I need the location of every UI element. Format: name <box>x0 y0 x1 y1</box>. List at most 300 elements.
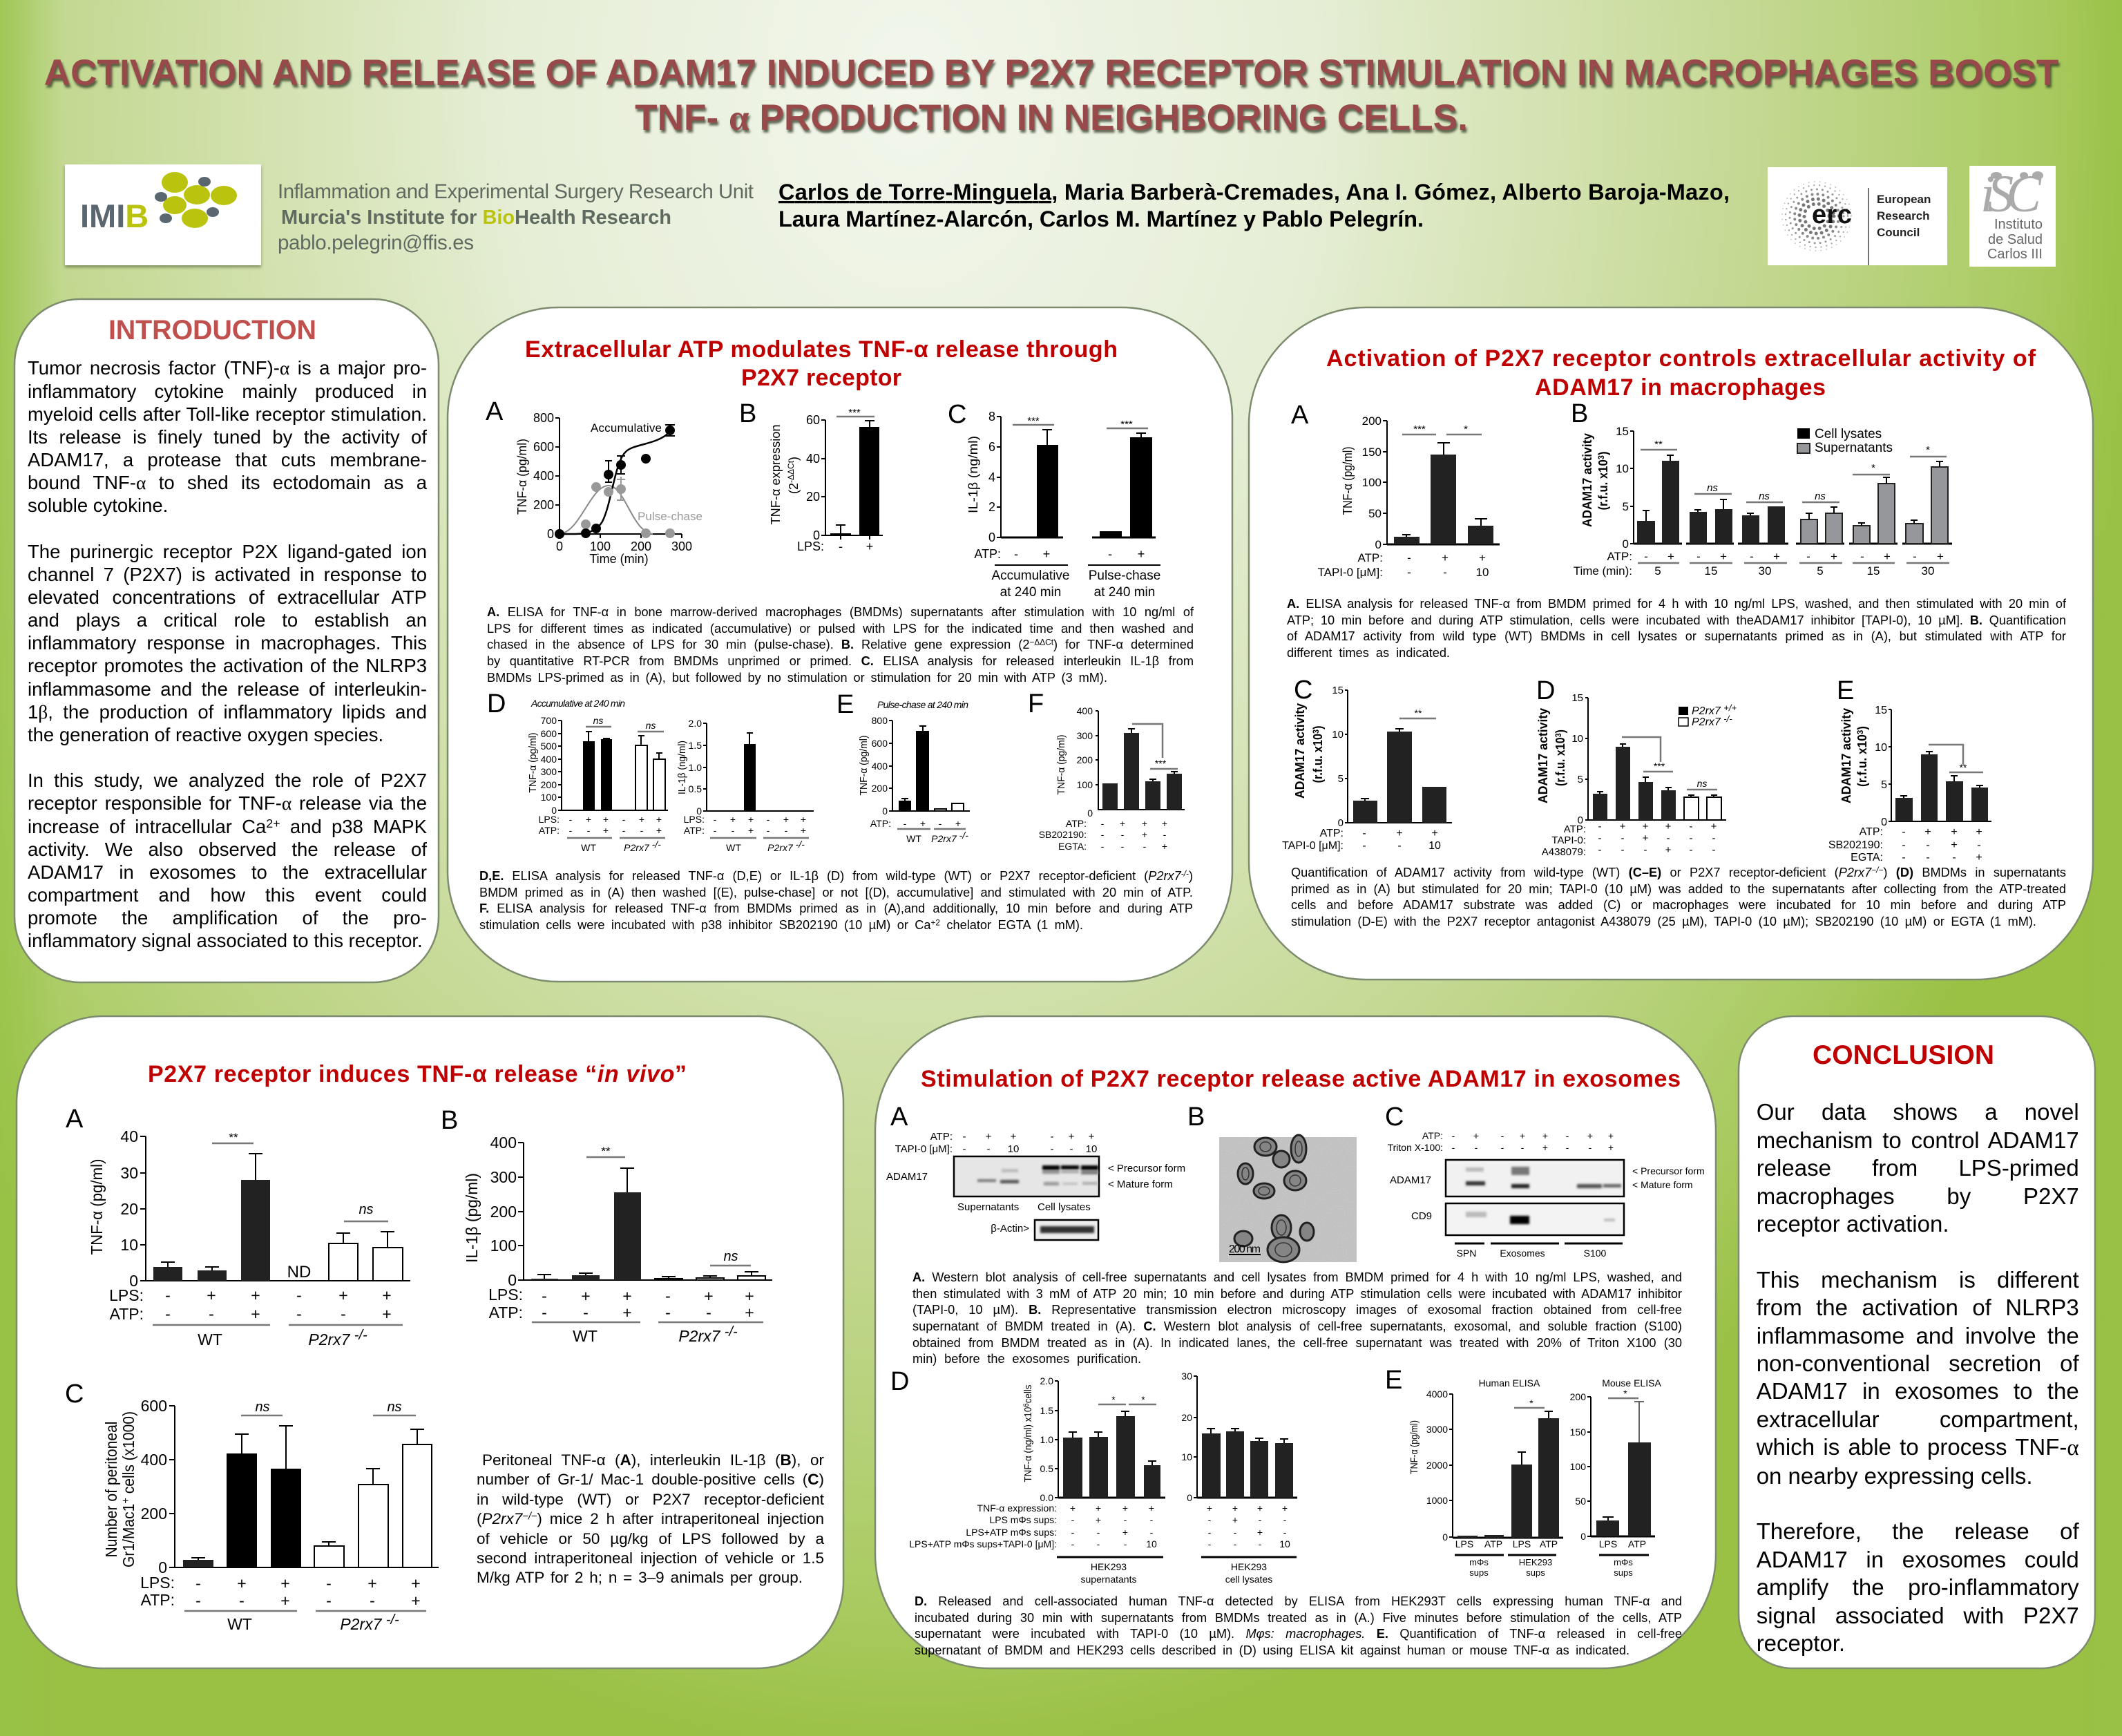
chart E: ADAM17 activity inhibitors: SB202190: <box>1828 839 1883 851</box>
western blot A: TAPI-0 [μM]: <box>895 1143 953 1155</box>
text block: conclusion: receptor. <box>1757 1630 1845 1656</box>
chart C: peritoneal cell counts: 200 <box>141 1505 167 1523</box>
chart E: human and mouse ELISA: LPS <box>1599 1538 1617 1549</box>
western blot A: ATP: <box>930 1131 953 1143</box>
chart C: ADAM17 activity with TAPI-0: 10 <box>1428 840 1441 852</box>
logo: European Research Council: Research <box>1877 209 1930 222</box>
chart D: human TNF in HEK293: --- <box>1208 1538 1262 1549</box>
text block: introduction: 1β, the production of inflammatory lipids and <box>28 701 427 723</box>
chart B: ADAM17 activity time course: * <box>1871 462 1875 474</box>
chart A: TNF time course: 0 <box>556 540 563 553</box>
chart C: peritoneal cell counts: ATP: <box>141 1591 175 1609</box>
chart E: ADAM17 activity inhibitors: 15 <box>1875 705 1887 716</box>
chart B: TNF expression: LPS: <box>797 540 824 553</box>
chart B: ADAM17 activity time course: 5 <box>1817 564 1824 578</box>
chart A: TNF time course: A <box>486 397 504 426</box>
text block: conclusion: receptor activation. <box>1757 1211 1949 1237</box>
affiliation text: Inflammation and Experimental Surgery Research Unit <box>278 180 754 203</box>
caption: charts A and B: A. ELISA analysis for released TNF-α from BMDM primed for 4 h with 10 ng/ml LPS, washed, and then stimulated with 20 min of <box>1287 597 2066 611</box>
text block: introduction <box>28 356 427 964</box>
chart E: human and mouse ELISA: 150 <box>1570 1427 1586 1438</box>
chart C: ADAM17 activity with TAPI-0: 5 <box>1338 773 1344 785</box>
chart C: ADAM17 activity with TAPI-0: 15 <box>1332 685 1344 696</box>
chart B: ADAM17 activity time course: 30 <box>1922 564 1934 578</box>
chart C: IL-1 beta release: 6 <box>988 440 995 454</box>
caption: in vivo charts: M/kg ATP for 2 h; n = 3–9 animals per group. <box>477 1569 803 1586</box>
chart B: TNF expression: 60 <box>806 413 820 427</box>
text block: introduction: ADAM17, a protease that cuts membrane- <box>28 449 427 470</box>
chart D: accumulative TNF and IL-1 beta: -++-++ <box>714 814 806 825</box>
text block: conclusion: on nearby expressing cells. <box>1757 1463 2033 1489</box>
heading: panel 2: Extracellular ATP modulates TNF-α release through <box>525 336 1118 363</box>
chart D: accumulative TNF and IL-1 beta: P2rx7 <box>624 842 649 853</box>
chart A: TNF with TAPI-0: 10 <box>1476 566 1489 579</box>
chart B: peritoneal IL-1 beta: ** <box>601 1145 611 1158</box>
western blot A: Supernatants <box>957 1201 1019 1213</box>
chart B: peritoneal IL-1 beta: LPS: <box>488 1286 523 1304</box>
chart C: IL-1 beta release: 2 <box>988 500 995 514</box>
chart E: pulse-chase TNF: 600 <box>872 738 888 749</box>
text block: introduction: The purinergic receptor P2X ligand-gated ion <box>28 541 427 562</box>
chart B: ADAM17 activity time course: -+-+-+-+-+-+ <box>1644 550 1944 563</box>
chart E: ADAM17 activity inhibitors: 0 <box>1881 817 1887 828</box>
logo: European Research Council <box>1768 167 1947 265</box>
chart D: human TNF in HEK293: 10 <box>1279 1538 1290 1549</box>
chart A: TNF time course: TNF-α (pg/ml) <box>515 439 529 515</box>
chart E: human and mouse ELISA: 0 <box>1580 1531 1586 1542</box>
chart C: peritoneal cell counts: + <box>120 1498 132 1504</box>
chart B: ADAM17 activity time course: Time (min): <box>1574 564 1632 578</box>
chart D: human TNF in HEK293: 0 <box>1187 1492 1192 1503</box>
chart D: human TNF in HEK293: cells <box>1022 1384 1034 1403</box>
chart A: TNF with TAPI-0: 50 <box>1368 507 1382 520</box>
text block: conclusion: Our data shows a novel <box>1757 1099 2079 1125</box>
chart E: ADAM17 activity inhibitors: ADAM17 activity <box>1839 708 1853 803</box>
chart E: human and mouse ELISA: 4000 <box>1426 1389 1448 1400</box>
chart D: accumulative TNF and IL-1 beta: 1.5 <box>689 740 702 751</box>
chart E: ADAM17 activity inhibitors: ---+ <box>1902 852 1982 864</box>
chart E: ADAM17 activity inhibitors: --+- <box>1902 839 1981 851</box>
chart A: peritoneal TNF: 0 <box>129 1272 138 1290</box>
text block: introduction: soluble cytokine. <box>28 495 168 516</box>
chart F: inhibitors TNF: EGTA: <box>1058 841 1087 852</box>
caption: charts A to C: LPS for different times as indicated (accumulative) or pulsed with LPS for the indicated time and then washed and <box>487 622 1194 636</box>
chart D: ADAM17 activity knock-out: 10 <box>1571 733 1583 745</box>
text block: introduction: Tumor necrosis factor (TNF)-α is a major pro- <box>28 357 427 379</box>
chart C: IL-1 beta release: Accumulative <box>992 569 1069 583</box>
chart F: inhibitors TNF: -+++ <box>1101 818 1167 829</box>
caption: in vivo charts: in wild-type (WT) or P2X7 receptor-deficient <box>477 1491 824 1508</box>
western blot A: A <box>890 1103 908 1132</box>
legend: -/- <box>1723 714 1732 724</box>
chart D: human TNF in HEK293: 2.0 <box>1040 1375 1053 1386</box>
western blot A: Cell lysates <box>1038 1201 1091 1213</box>
western blot A: < Precursor form <box>1108 1163 1185 1174</box>
chart E: human and mouse ELISA <box>1385 1366 1661 1578</box>
chart C: peritoneal cell counts: Number of peritoneal <box>102 1422 120 1557</box>
chart D: accumulative TNF and IL-1 beta <box>487 689 814 853</box>
heading: panel 3: Activation of P2X7 receptor controls extracellular activity of <box>1326 345 2036 372</box>
chart D: ADAM17 activity knock-out: 0 <box>1578 814 1583 826</box>
chart D: ADAM17 activity knock-out: ) <box>1554 729 1567 733</box>
logo: IMIB: IMIB <box>80 198 149 234</box>
chart B: peritoneal IL-1 beta <box>441 1106 772 1345</box>
chart D: human TNF in HEK293: ++++ <box>1207 1503 1288 1514</box>
chart E: pulse-chase TNF: 800 <box>872 715 888 726</box>
panel: introduction <box>15 299 439 982</box>
chart E: human and mouse ELISA: ATP <box>1484 1538 1502 1549</box>
logo: European Research Council: erc <box>1812 200 1852 229</box>
heading: introduction: INTRODUCTION <box>108 315 316 345</box>
chart E: human and mouse ELISA: sups <box>1469 1567 1489 1578</box>
caption: in vivo charts: number of Gr-1/ Mac-1 double-positive cells (C) <box>477 1471 824 1488</box>
caption: charts C to E: stimulation (D-E) with the P2X7 receptor antagonist A438079 (25 µM), TAPI-0 (10 µM); SB202190 (10 µM) or EGTA (1 mM). <box>1291 915 2036 928</box>
western blot A: 10 <box>1008 1143 1019 1155</box>
caption: in vivo charts <box>477 1451 824 1592</box>
chart B: TNF expression: 20 <box>806 490 820 504</box>
chart C: IL-1 beta release: Pulse-chase <box>1089 569 1160 583</box>
panel: exosomes <box>875 1016 1716 1668</box>
chart A: peritoneal TNF: TNF-α (pg/ml) <box>88 1159 106 1255</box>
chart C: ADAM17 activity with TAPI-0: 3 <box>1311 729 1321 734</box>
chart D: human TNF in HEK293: HEK293 <box>1231 1561 1267 1572</box>
chart A: peritoneal TNF: ND <box>287 1263 311 1281</box>
chart C: peritoneal cell counts: cells (x1000) <box>120 1411 137 1498</box>
chart A: TNF with TAPI-0: * <box>1464 423 1468 435</box>
chart C: peritoneal cell counts: ns <box>255 1400 270 1415</box>
chart B: ADAM17 activity time course: (r.f.u. x10 <box>1596 455 1610 510</box>
chart C: peritoneal cell counts: 400 <box>141 1451 167 1469</box>
chart A: peritoneal TNF: --+--+ <box>165 1305 392 1323</box>
chart D: accumulative TNF and IL-1 beta: ns <box>646 720 656 731</box>
chart B: peritoneal IL-1 beta: 0 <box>508 1271 517 1289</box>
chart E: pulse-chase TNF: E <box>837 690 854 719</box>
chart D: accumulative TNF and IL-1 beta: TNF-α (pg/ml) <box>527 732 539 793</box>
chart C: IL-1 beta release: at 240 min <box>1000 585 1061 600</box>
chart B: ADAM17 activity time course: 30 <box>1759 564 1771 578</box>
chart E: human and mouse ELISA: mΦs <box>1614 1557 1633 1567</box>
logo: Instituto de Salud Carlos III: Instituto <box>1994 217 2043 232</box>
chart F: inhibitors TNF: ATP: <box>1066 818 1087 829</box>
chart F: inhibitors TNF: --+- <box>1101 829 1167 840</box>
chart E: human and mouse ELISA: 0 <box>1442 1532 1448 1543</box>
chart A: TNF with TAPI-0: *** <box>1413 423 1426 435</box>
chart B: ADAM17 activity time course: 5 <box>1654 564 1661 578</box>
chart D: human TNF in HEK293: -+-- <box>1071 1514 1154 1525</box>
logo: IMIB <box>65 164 261 265</box>
chart D: human TNF in HEK293: LPS mΦs sups: <box>989 1514 1057 1525</box>
text block: introduction: ADAM17 in exosomes to the extracellular <box>28 861 427 883</box>
chart A: peritoneal TNF: P2rx7 <box>308 1330 350 1348</box>
caption: charts D to F: BMDM primed as in (A) then washed [(E), pulse-chase] or not [(D), accumulative] and stimulated with 20 min of ATP. <box>479 886 1193 899</box>
chart A: TNF time course: 600 <box>533 440 554 454</box>
chart C: IL-1 beta release: ATP: <box>974 547 1001 561</box>
logo: Instituto de Salud Carlos III <box>1969 165 2056 267</box>
heading: panel 5: Stimulation of P2X7 receptor release active ADAM17 in exosomes <box>921 1066 1681 1092</box>
chart D: accumulative TNF and IL-1 beta: 0 <box>696 805 702 817</box>
logo: European Research Council: Council <box>1877 226 1920 239</box>
caption: in vivo charts: second intraperitoneal injection of vehicle or 1.5 <box>477 1549 824 1567</box>
western blot C: ATP: <box>1422 1130 1443 1141</box>
chart D: accumulative TNF and IL-1 beta: P2rx7 <box>767 842 793 853</box>
chart D: human TNF in HEK293: HEK293 <box>1091 1561 1127 1572</box>
chart E: pulse-chase TNF: ATP: <box>870 818 891 829</box>
chart B: peritoneal IL-1 beta: -/- <box>725 1324 738 1339</box>
chart D: human TNF in HEK293: 0.0 <box>1040 1492 1053 1503</box>
electron microscopy image B: 200 nm <box>1229 1243 1261 1255</box>
chart B: peritoneal IL-1 beta: --+--+ <box>542 1304 754 1322</box>
affiliation text <box>278 180 754 254</box>
caption: in vivo charts: of vehicle or 50 µg/kg of LPS followed by a <box>477 1530 824 1547</box>
western blot C: < Precursor form <box>1632 1165 1705 1176</box>
chart B: ADAM17 activity time course: 15 <box>1616 425 1629 438</box>
chart B: ADAM17 activity time course: ) <box>1596 452 1610 455</box>
chart E: ADAM17 activity inhibitors: 10 <box>1875 742 1887 754</box>
chart E: human and mouse ELISA: 1000 <box>1426 1495 1448 1506</box>
chart C: peritoneal cell counts: WT <box>227 1615 252 1633</box>
chart A: TNF time course <box>486 397 702 566</box>
chart B: TNF expression: -ΔΔCt <box>786 460 796 483</box>
chart D: human TNF in HEK293: 1.5 <box>1040 1405 1053 1416</box>
panel: in vivo <box>17 1016 843 1668</box>
legend: Cell lysates <box>1815 427 1882 441</box>
chart A: peritoneal TNF: 10 <box>120 1236 138 1254</box>
western blot C: Exosomes <box>1500 1248 1545 1259</box>
chart A: TNF with TAPI-0: 100 <box>1362 476 1382 489</box>
chart D: human TNF in HEK293: -+-- <box>1208 1514 1287 1525</box>
chart A: TNF with TAPI-0: 200 <box>1362 414 1382 428</box>
chart D: human TNF in HEK293: * <box>1141 1394 1145 1405</box>
caption: charts D to F <box>479 868 1193 936</box>
western blot C: S100 <box>1584 1248 1607 1259</box>
chart D: ADAM17 activity knock-out: D <box>1536 676 1555 705</box>
chart D: human TNF in HEK293: 10 <box>1146 1538 1157 1549</box>
heading: panel 3 <box>1326 345 2036 401</box>
chart B: peritoneal IL-1 beta: IL-1β (pg/ml) <box>463 1173 481 1263</box>
chart F: inhibitors TNF: SB202190: <box>1039 829 1087 840</box>
logo: Instituto de Salud Carlos III: iSC <box>1980 165 2042 223</box>
title: ACTIVATION AND RELEASE OF ADAM17 INDUCED BY P2X7 RECEPTOR STIMULATION IN MACROPHAGES BOOST <box>44 53 2058 93</box>
chart B: ADAM17 activity time course: 15 <box>1705 564 1717 578</box>
chart C: peritoneal cell counts: C <box>65 1380 84 1409</box>
western blot A: ADAM17 <box>886 1171 928 1183</box>
chart D: accumulative TNF and IL-1 beta: 100 <box>541 792 557 803</box>
chart A: TNF with TAPI-0: -- <box>1407 566 1447 579</box>
caption: charts D to F: D,E. ELISA analysis for released TNF-α (D,E) or IL-1β (D) from wild-type (WT) or P2X7 receptor-deficient (P2rx7-/-) <box>479 868 1193 883</box>
chart C: ADAM17 activity with TAPI-0: ) <box>1311 725 1325 729</box>
text block: introduction: channel 7 (P2X7) is activated in response to <box>28 564 427 585</box>
text block: introduction: elevated concentrations of extracellular ATP <box>28 586 427 608</box>
chart D: ADAM17 activity knock-out: 3 <box>1554 733 1563 737</box>
chart C: peritoneal cell counts: LPS: <box>140 1574 175 1592</box>
legend <box>1679 703 1737 728</box>
chart A: TNF with TAPI-0: 0 <box>1375 538 1382 551</box>
chart C: ADAM17 activity with TAPI-0: ATP: <box>1320 828 1344 839</box>
chart D: accumulative TNF and IL-1 beta: IL-1β (ng/ml) <box>676 741 688 794</box>
chart C: ADAM17 activity with TAPI-0: 10 <box>1332 729 1344 741</box>
legend <box>1797 427 1893 455</box>
chart E: pulse-chase TNF: -+-+ <box>904 818 961 829</box>
affiliation text: Murcia's Institute for BioHealth Research <box>281 207 671 229</box>
logo: Instituto de Salud Carlos III: de Salud <box>1988 232 2043 247</box>
chart B: ADAM17 activity time course: 10 <box>1616 462 1629 475</box>
chart D: human TNF in HEK293: * <box>1111 1394 1116 1405</box>
chart E: human and mouse ELISA: E <box>1385 1366 1402 1395</box>
chart D: human TNF in HEK293: 0.5 <box>1040 1463 1053 1474</box>
chart B: ADAM17 activity time course: ADAM17 activity <box>1580 433 1594 527</box>
chart C: ADAM17 activity with TAPI-0 <box>1282 676 1452 852</box>
caption: D and E: incubated during 30 min with supernatants from BMDMs treated as in (A.) Five minutes before stimulation of the cells, ATP <box>915 1611 1682 1625</box>
chart E: human and mouse ELISA: ATP <box>1540 1538 1558 1549</box>
chart D: accumulative TNF and IL-1 beta: WT <box>581 842 596 853</box>
chart D: ADAM17 activity knock-out: -+++-+ <box>1598 821 1717 832</box>
chart C: ADAM17 activity with TAPI-0: (r.f.u. x10 <box>1311 728 1325 783</box>
text block: introduction: compartment and how this event could <box>28 884 427 906</box>
chart A: TNF time course: 100 <box>590 540 611 553</box>
chart C: IL-1 beta release: 4 <box>988 470 995 484</box>
caption: charts C to E: Quantification of ADAM17 activity from wild-type (WT) (C–E) or P2X7 receptor-deficient (P2rx7−/−) (D) BMDMs in supernatants <box>1291 865 2066 879</box>
chart A: peritoneal TNF: 30 <box>120 1164 138 1182</box>
chart B: TNF expression: B <box>739 399 756 428</box>
chart E: human and mouse ELISA: ATP <box>1628 1538 1646 1549</box>
chart A: TNF with TAPI-0: TAPI-0 [μM]: <box>1318 566 1383 579</box>
chart D: human TNF in HEK293: --+- <box>1071 1527 1154 1538</box>
chart E: ADAM17 activity inhibitors: ATP: <box>1860 826 1883 838</box>
chart D: ADAM17 activity knock-out: ADAM17 activity <box>1536 708 1550 803</box>
chart B: TNF expression <box>739 399 883 553</box>
caption: A to C: (TAPI-0, 10 µM). B. Representative transmission electron microscopy images of exosomal fraction obtained from cell-free <box>912 1303 1682 1317</box>
heading: conclusion: CONCLUSION <box>1813 1040 1994 1070</box>
chart E: human and mouse ELISA: * <box>1623 1388 1627 1399</box>
chart D: ADAM17 activity knock-out: (r.f.u. x10 <box>1554 732 1567 786</box>
chart A: TNF time course: 200 <box>631 540 651 553</box>
caption: A to C <box>912 1270 1682 1371</box>
chart F: inhibitors TNF: 300 <box>1077 730 1093 741</box>
chart A: TNF time course: 300 <box>671 540 692 553</box>
text block: introduction: bound TNF-α to shed its ectodomain as a <box>28 472 427 493</box>
chart C: peritoneal cell counts: 0 <box>158 1558 167 1576</box>
chart E: ADAM17 activity inhibitors: ** <box>1960 762 1967 773</box>
caption: charts A to C: by quantitative RT-PCR from BMDMs unprimed or primed. C. ELISA analysis for released interleukin IL-1β from <box>487 654 1194 668</box>
legend: P2rx7 <box>1692 716 1721 728</box>
chart E: human and mouse ELISA: Human ELISA <box>1479 1377 1540 1389</box>
chart D: human TNF in HEK293: --+- <box>1208 1527 1287 1538</box>
chart B: peritoneal IL-1 beta: ns <box>723 1249 738 1264</box>
chart F: inhibitors TNF: F <box>1028 689 1044 718</box>
chart B: ADAM17 activity time course: 5 <box>1623 500 1629 513</box>
chart B: peritoneal IL-1 beta: P2rx7 <box>678 1327 720 1345</box>
authors: Laura Martínez-Alarcón, Carlos M. Martínez y Pablo Pelegrín. <box>778 207 1424 231</box>
chart B: ADAM17 activity time course: ATP: <box>1607 550 1632 563</box>
electron microscopy image B: B <box>1187 1103 1205 1132</box>
chart E: human and mouse ELISA: sups <box>1614 1567 1633 1578</box>
chart E: human and mouse ELISA: LPS <box>1513 1538 1531 1549</box>
chart E: pulse-chase TNF: 400 <box>872 761 888 772</box>
chart D: accumulative TNF and IL-1 beta: ATP: <box>539 825 560 836</box>
chart C: peritoneal cell counts: ns <box>387 1400 402 1415</box>
chart A: peritoneal TNF: ATP: <box>110 1305 144 1323</box>
chart C: IL-1 beta release: IL-1β (ng/ml) <box>966 436 980 513</box>
text block: introduction: and plays a critical role to establish an <box>28 609 427 631</box>
western blot C <box>1385 1103 1705 1259</box>
caption: charts A to C: A. ELISA for TNF-α in bone marrow-derived macrophages (BMDMs) supernatants after stimulation with 10 ng/ml of <box>487 605 1194 619</box>
chart C: peritoneal cell counts: P2rx7 <box>340 1615 381 1633</box>
text block: introduction: Its release is finely tuned by the activity of <box>28 426 427 448</box>
chart B: ADAM17 activity time course: B <box>1571 399 1588 428</box>
chart D: accumulative TNF and IL-1 beta: 700 <box>541 715 557 726</box>
text block: introduction: inflammatory cytokine mainly produced in <box>28 381 427 402</box>
chart D: ADAM17 activity knock-out: A438079: <box>1542 846 1586 858</box>
chart C: peritoneal cell counts <box>65 1380 439 1633</box>
chart C: ADAM17 activity with TAPI-0: -- <box>1362 840 1402 852</box>
caption: in vivo charts: Peritoneal TNF-α (A), interleukin IL-1β (B), or <box>482 1451 824 1469</box>
chart B: peritoneal IL-1 beta: 100 <box>490 1237 517 1255</box>
chart A: peritoneal TNF: ns <box>359 1202 374 1217</box>
chart A: TNF time course: Accumulative <box>591 421 662 435</box>
chart B: ADAM17 activity time course: ** <box>1654 439 1663 450</box>
chart C: IL-1 beta release: 0 <box>988 531 995 544</box>
chart B: TNF expression: (2 <box>787 483 801 494</box>
chart D: accumulative TNF and IL-1 beta: -++-++ <box>569 814 662 825</box>
title <box>15 50 2087 147</box>
text block: introduction: In this study, we analyzed the role of P2X7 <box>28 770 427 791</box>
caption: charts A to C: chased in the absence of LPS for 30 min (pulse-chase). B. Relative gene expression (2−ΔΔCt) for TNF-α determined <box>487 638 1194 651</box>
chart A: TNF with TAPI-0: -++ <box>1407 551 1486 564</box>
text block: introduction: receptor responsible for TNF-α release via the <box>28 792 427 814</box>
chart B: ADAM17 activity time course: * <box>1926 444 1930 456</box>
chart B: TNF expression: 0 <box>813 528 820 542</box>
chart A: peritoneal TNF: LPS: <box>109 1286 144 1304</box>
chart A: TNF with TAPI-0 <box>1291 401 1500 579</box>
affiliation text: pablo.pelegrin@ffis.es <box>278 231 474 254</box>
logo: Instituto de Salud Carlos III: Carlos III <box>1987 247 2043 262</box>
western blot A: < Mature form <box>1108 1179 1173 1190</box>
western blot C: CD9 <box>1411 1210 1432 1222</box>
text block: conclusion: Therefore, the release of <box>1757 1518 2079 1544</box>
chart A: peritoneal TNF: -++-++ <box>165 1286 392 1304</box>
chart C: peritoneal cell counts: --+--+ <box>195 1592 421 1610</box>
chart A: TNF time course: 400 <box>533 469 554 483</box>
caption: D and E: D. Released and cell-associated human TNF-α detected by ELISA from HEK293T cells expressing human TNF-α and <box>915 1594 1682 1608</box>
chart C: IL-1 beta release: *** <box>1027 415 1040 427</box>
chart E: human and mouse ELISA: 2000 <box>1426 1460 1448 1471</box>
chart E: pulse-chase TNF: -/- <box>959 830 968 841</box>
chart D: human TNF in HEK293: TNF-α (ng/ml) x10 <box>1022 1398 1034 1482</box>
caption: charts A to C: BMDMs LPS-primed as in (A), but followed by no stimulation or stimulation for 20 min with ATP (3 mM). <box>487 671 1107 685</box>
chart C: IL-1 beta release <box>948 400 1160 600</box>
text block: introduction: the generation of reactive oxygen species. <box>28 724 383 745</box>
chart E: ADAM17 activity inhibitors: (r.f.u. x10 <box>1855 732 1869 787</box>
chart E: pulse-chase TNF: P2rx7 <box>931 833 957 844</box>
chart C: peritoneal cell counts: -++-++ <box>195 1574 421 1592</box>
chart D: accumulative TNF and IL-1 beta: 500 <box>541 741 557 752</box>
chart B: TNF expression: 40 <box>806 452 820 466</box>
chart D: human TNF in HEK293: LPS+ATP mΦs sups: <box>966 1527 1057 1538</box>
chart D: ADAM17 activity knock-out: TAPI-0: <box>1551 834 1586 846</box>
caption: charts A and B: of ADAM17 activity from wild type (WT) BMDMs in cell lysates or supernatants primed as in (A), but stimulated with ATP for <box>1287 629 2066 643</box>
chart E: ADAM17 activity inhibitors: -+++ <box>1902 826 1982 838</box>
caption: charts D to F: F. ELISA analysis for released TNF-α from BMDMs primed as in (A),and additionally, 10 min before and during ATP <box>479 902 1193 915</box>
text block: conclusion: ADAM17 in exosomes could <box>1757 1547 2079 1572</box>
chart C: peritoneal cell counts: Gr1/Mac1 <box>120 1498 137 1567</box>
chart B: TNF expression: ) <box>787 457 801 461</box>
panel: conclusion <box>1739 1016 2095 1668</box>
legend: P2rx7 <box>1692 705 1721 717</box>
chart D: human TNF in HEK293: TNF-α expression: <box>977 1503 1057 1514</box>
chart D: accumulative TNF and IL-1 beta: 1.0 <box>689 762 702 773</box>
chart A: TNF with TAPI-0: A <box>1291 401 1309 430</box>
chart A: peritoneal TNF <box>66 1105 410 1348</box>
